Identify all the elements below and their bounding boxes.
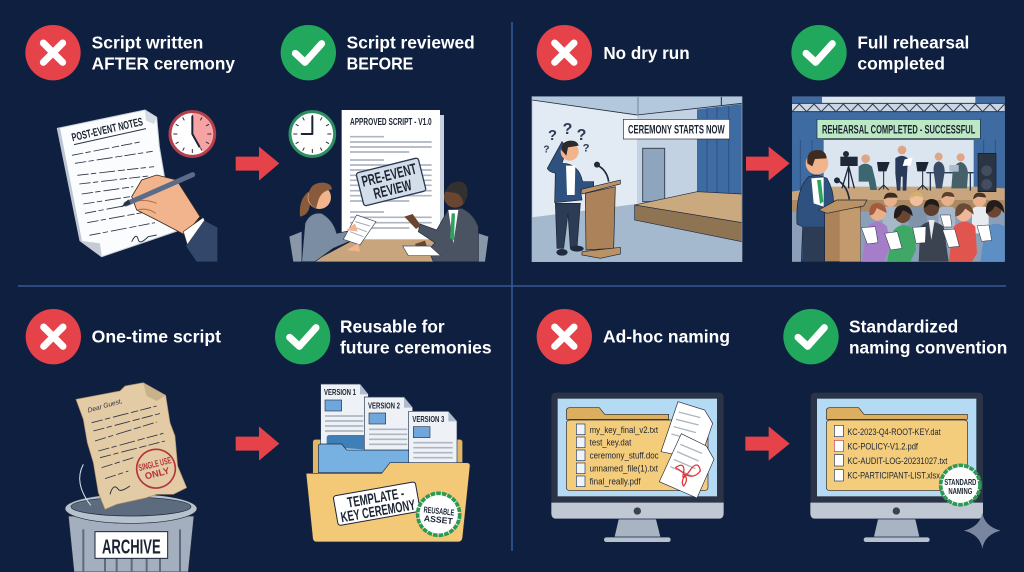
illustration: left monitor with messy files: test_key.dat xyxy=(590,438,632,448)
heading: standardized naming convention: naming convention xyxy=(849,337,1007,357)
illustration: left monitor with messy files: final_really.pdf xyxy=(590,476,641,486)
illustration: right monitor with standard files: KC-POLICY-V1.2.pdf xyxy=(847,442,918,452)
illustration: rehearsal stage xyxy=(792,97,1005,262)
heading: script written after ceremony: AFTER ceremony xyxy=(92,53,235,73)
heading: no dry run: No dry run xyxy=(603,43,690,63)
illustration: confused speaker at podium: ? xyxy=(548,128,557,144)
icon: green check xyxy=(791,25,847,80)
icon: red cross xyxy=(537,25,592,80)
heading: standardized naming convention xyxy=(849,316,1007,357)
illustration: audience with scripts xyxy=(861,192,1005,262)
arrow xyxy=(745,426,790,461)
illustration: left monitor with messy files: ceremony_stuff.doc xyxy=(590,451,659,461)
illustration: confused speaker at podium xyxy=(543,121,620,258)
illustration: confused speaker at podium: ? xyxy=(563,121,572,138)
illustration: crumpled single-use script: Dear Guest, xyxy=(87,398,124,415)
arrow xyxy=(236,147,279,181)
illustration: crumpled single-use script: ONLY xyxy=(144,465,171,481)
illustration: crumpled single-use script: SINGLE USE xyxy=(137,455,172,473)
illustration: approved script document: REVIEW xyxy=(372,177,414,203)
icon: red cross xyxy=(25,25,81,80)
illustration: hand writing with pen xyxy=(121,175,217,262)
illustration: post-event notes paper: POST-EVENT NOTES xyxy=(71,116,144,144)
panel: script timing xyxy=(25,25,488,262)
illustration: left monitor with messy files: my_key_final_v2.txt xyxy=(590,425,658,435)
illustration: confused speaker at podium: ? xyxy=(577,127,586,144)
heading: standardized naming convention: Standardized xyxy=(849,316,958,336)
heading: one-time script: One-time script xyxy=(92,327,221,347)
illustration: template folder with versions: TEMPLATE - xyxy=(346,486,406,512)
heading: script written after ceremony: Script written xyxy=(92,33,203,53)
illustration: approved script document: PRE-EVENT xyxy=(360,161,419,191)
label: rehearsal completed successful xyxy=(817,119,980,139)
illustration: template folder with versions: KEY CEREMONY xyxy=(340,497,417,526)
illustration: right monitor with standard files: STANDARD xyxy=(944,477,976,487)
illustration: left monitor with messy files xyxy=(551,393,724,542)
illustration: template folder with versions: ASSET xyxy=(423,513,454,526)
illustration: confused speaker at podium: ? xyxy=(543,145,549,156)
heading: full rehearsal completed xyxy=(857,33,969,73)
heading: reusable for future ceremonies: future ceremonies xyxy=(340,337,492,357)
heading: reusable for future ceremonies xyxy=(340,316,492,357)
icon: green check xyxy=(281,25,336,80)
arrow xyxy=(236,426,279,461)
illustration: right monitor with standard files: KC-PARTICIPANT-LIST.xlsx xyxy=(847,470,940,480)
icon: red cross xyxy=(26,309,81,364)
label: ceremony starts now xyxy=(623,119,730,139)
panel: script reuse xyxy=(26,309,492,572)
illustration: approved script document: APPROVED SCRIPT - V1.0 xyxy=(350,117,432,128)
illustration: template folder with versions xyxy=(306,384,470,542)
illustration: empty stage scene xyxy=(532,97,742,262)
label: ceremony starts now: CEREMONY STARTS NOW xyxy=(628,124,725,137)
heading: reusable for future ceremonies: Reusable for xyxy=(340,316,445,336)
icon: red cross xyxy=(537,309,592,364)
illustration: confused speaker at podium: ? xyxy=(583,142,590,154)
illustration: review meeting xyxy=(289,181,488,262)
icon: green check xyxy=(783,309,839,364)
illustration: template folder with versions: VERSION 2 xyxy=(368,400,400,410)
heading: script reviewed before: Script reviewed xyxy=(347,33,475,53)
illustration: right monitor with standard files xyxy=(810,393,983,542)
illustration: crumpled single-use script xyxy=(76,383,187,509)
illustration: left monitor with messy files: unnamed_file(1).txt xyxy=(590,463,658,473)
icon: green clock xyxy=(290,112,335,156)
heading: script reviewed before xyxy=(347,33,475,73)
icon: green check xyxy=(275,309,330,364)
heading: script written after ceremony xyxy=(92,33,235,73)
illustration: template folder with versions: REUSABLE xyxy=(423,504,455,518)
arrow xyxy=(746,147,790,181)
illustration: right monitor with standard files: NAMING xyxy=(948,486,973,496)
panel: dry run xyxy=(532,25,1005,262)
icon: red clock xyxy=(170,112,215,156)
heading: script reviewed before: BEFORE xyxy=(347,53,413,73)
panel: file naming xyxy=(537,309,1007,549)
illustration: archive bin: ARCHIVE xyxy=(102,535,161,558)
illustration: template folder with versions: VERSION 1 xyxy=(324,387,356,397)
illustration: approved script document xyxy=(342,110,444,240)
heading: full rehearsal completed: completed xyxy=(857,53,945,73)
illustration: right monitor with standard files: KC-2023-Q4-ROOT-KEY.dat xyxy=(847,427,941,437)
icon: sparkle xyxy=(964,513,1001,549)
illustration: post-event notes paper xyxy=(57,110,180,257)
illustration: crew on stage xyxy=(840,146,996,192)
illustration: archive bin xyxy=(65,464,197,572)
illustration: right monitor with standard files: KC-AUDIT-LOG-20231027.txt xyxy=(847,456,948,466)
heading: ad-hoc naming: Ad-hoc naming xyxy=(603,327,730,347)
illustration: speaker at podium xyxy=(797,150,867,262)
illustration: template folder with versions: VERSION 3 xyxy=(412,414,444,424)
heading: full rehearsal completed: Full rehearsal xyxy=(857,33,969,53)
